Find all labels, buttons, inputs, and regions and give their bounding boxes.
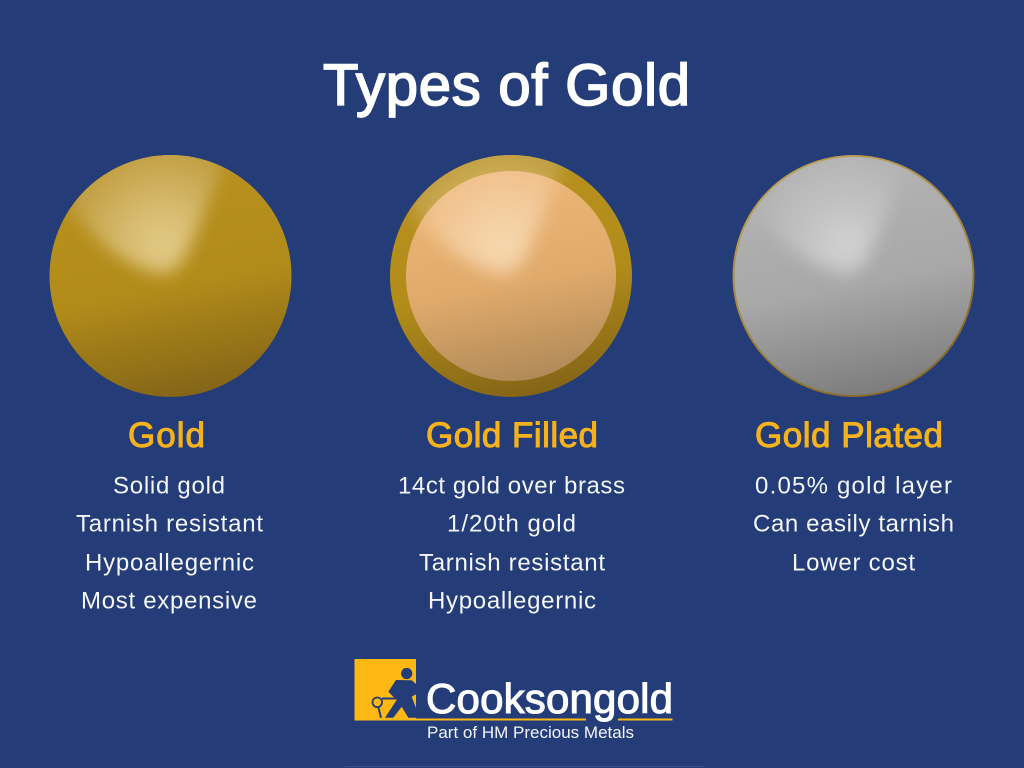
panel: gold	[50, 155, 292, 614]
icon: gold filled sphere	[390, 155, 632, 397]
heading: Gold Filled: Gold Filled	[426, 416, 598, 455]
text: gold properties: Solid gold	[113, 473, 225, 500]
text: gold filled properties: Hypoallegernic	[428, 588, 596, 615]
logo: Cooksongold	[354, 659, 673, 742]
heading: Gold: Gold	[128, 416, 205, 455]
text: gold properties	[76, 473, 263, 615]
text: gold filled properties: Tarnish resistant	[419, 550, 605, 576]
text: gold plated properties: Can easily tarnish	[753, 511, 954, 538]
panel: gold plated	[732, 155, 974, 570]
text: gold plated properties: Lower cost	[792, 550, 915, 576]
wordmark underline	[416, 718, 672, 720]
text: gold properties: Hypoallegernic	[85, 550, 254, 576]
panel: gold filled	[390, 155, 632, 614]
title: Types of Gold	[323, 53, 690, 118]
text: gold filled properties: 14ct gold over brass	[398, 473, 625, 500]
text: gold filled properties: 1/20th gold	[447, 511, 576, 538]
icon: gold plated sphere	[732, 155, 974, 397]
text: gold filled properties	[398, 473, 625, 615]
icon: yellow square with figure	[354, 659, 416, 720]
heading: Gold Plated: Gold Plated	[755, 416, 943, 455]
wordmark: Cooksongold	[426, 675, 673, 722]
tagline: Part of HM Precious Metals	[427, 724, 634, 742]
text: gold plated properties: 0.05% gold layer	[755, 473, 952, 500]
text: gold properties: Most expensive	[81, 588, 257, 615]
text: gold plated properties	[753, 473, 954, 576]
icon: solid gold sphere	[50, 155, 292, 397]
text: gold properties: Tarnish resistant	[76, 511, 263, 538]
